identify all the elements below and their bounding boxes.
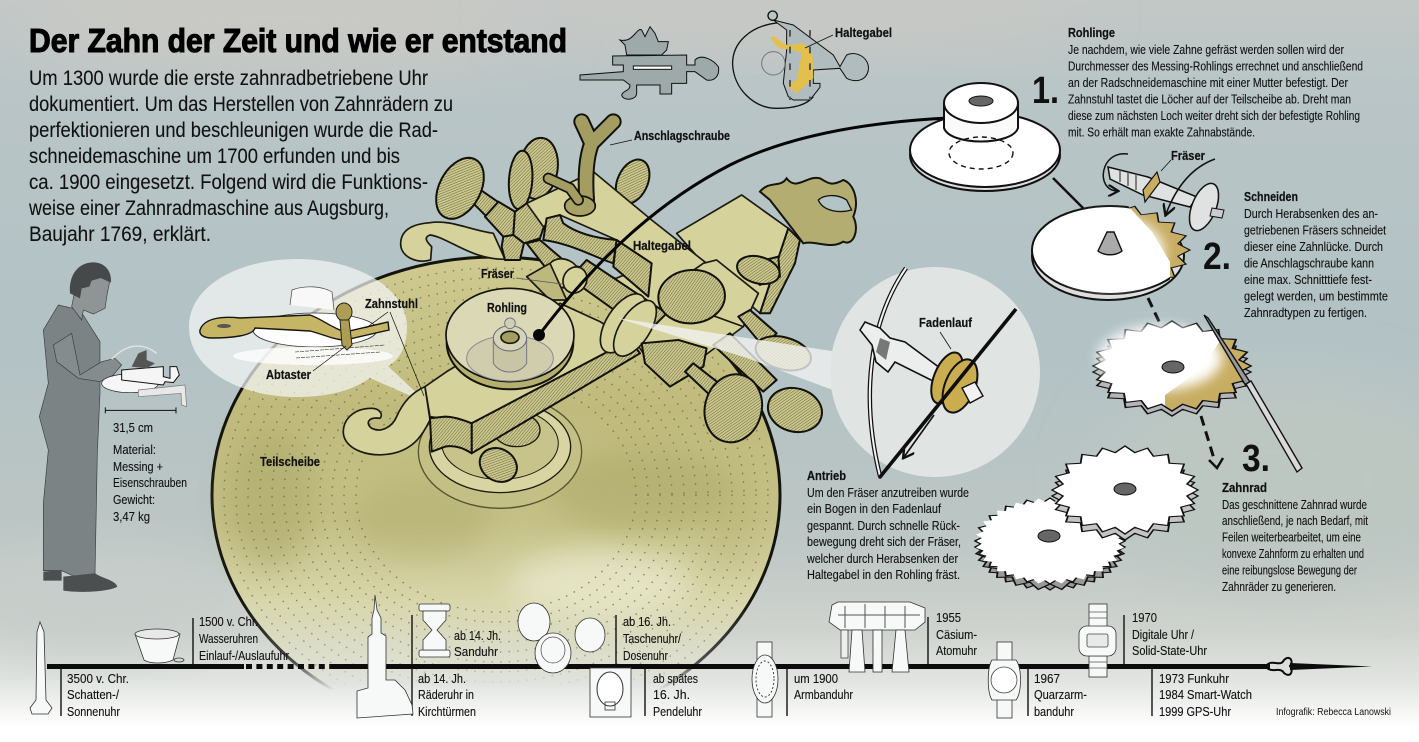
text block: Antrieb: ein Bogen in den Fadenlauf	[807, 501, 941, 516]
text block: Zahnrad	[1222, 480, 1368, 594]
icon: hourglass	[419, 604, 450, 657]
timeline labels: 1973 Funkuhr	[1159, 671, 1230, 686]
panel: gears right	[910, 83, 1302, 596]
timeline labels: Sonnenuhr	[67, 704, 121, 719]
hex block right	[642, 333, 777, 398]
text block: Schneiden: Zahnradtypen zu fertigen.	[1244, 305, 1367, 320]
timeline labels: 1500 v. Chr.	[199, 614, 258, 629]
machine facts: Eisenschrauben	[113, 475, 187, 490]
icon: pocket watches	[518, 603, 605, 673]
timeline labels: Taschenuhr/	[623, 631, 681, 646]
timeline labels: Atomuhr	[936, 643, 978, 658]
timeline labels: Quarzarm-	[1034, 687, 1087, 702]
scale bar	[105, 407, 176, 413]
ticks	[61, 615, 1152, 716]
icon: Fräser	[1103, 154, 1224, 235]
text block: Rohlinge: mit. So erhält man exakte Zahnabstände.	[1068, 124, 1255, 140]
icon: water clock	[135, 629, 184, 663]
step numbers: 1.	[1032, 70, 1059, 112]
right block	[677, 195, 800, 313]
panel: Teilscheibe disc	[212, 257, 780, 733]
text block: Zahnrad: konvexe Zahnform zu erhalten und	[1222, 546, 1364, 561]
intro text: Baujahr 1769, erklärt.	[29, 223, 211, 246]
text block: Schneiden: dieser eine Zahnlücke. Durch	[1244, 239, 1383, 254]
text block: Antrieb: Um den Fräser anzutreiben wurde	[807, 485, 969, 500]
diagram: side view machine	[580, 27, 719, 99]
timeline labels: Pendeluhr	[653, 704, 703, 719]
timeline labels	[67, 610, 1252, 719]
upper scroll	[401, 222, 505, 261]
icon: spindle with gold pulley	[860, 322, 984, 418]
text block: Zahnrad: eine reibungslose Bewegung der	[1222, 562, 1357, 578]
icon: fine-toothed gear	[964, 492, 1136, 596]
spindle	[527, 240, 667, 333]
text block: Antrieb: gespannt. Durch schnelle Rück-	[807, 518, 960, 533]
machine facts: Messing +	[113, 459, 163, 474]
person	[39, 262, 122, 592]
Anschlagschraube Y-screw	[548, 122, 613, 216]
text block: Rohlinge: an der Radschneidemaschine mit einer Mutter befestigt. Der	[1068, 75, 1349, 90]
machine part labels: Fadenlauf	[919, 315, 973, 330]
callout: Zahnstuhl magnifier	[189, 259, 427, 403]
Haltegabel plate	[527, 172, 758, 357]
timeline labels: ab 16. Jh.	[623, 614, 671, 629]
timeline labels: Armbanduhr	[794, 687, 854, 702]
timeline labels: Räderuhr in	[418, 687, 474, 702]
illustration: man standing with machine	[39, 262, 187, 592]
machine part labels: Teilscheibe	[260, 454, 320, 469]
timeline labels: ab 14. Jh.	[454, 628, 501, 643]
intro text: dokumentiert. Um das Herstellen von Zahnrädern zu	[29, 93, 453, 116]
text block: Zahnrad: Zahnräder zu generieren.	[1222, 579, 1336, 594]
icon: church tower	[357, 595, 413, 718]
timeline labels: 1970	[1132, 610, 1157, 625]
text block: Rohlinge: Zahnstuhl tastet die Löcher auf der Teilscheibe ab. Dreht man	[1068, 92, 1351, 106]
machine part labels: Abtaster	[266, 367, 311, 382]
timeline labels: Dosenuhr	[623, 648, 669, 663]
text block: Rohlinge: Je nachdem, wie viele Zahne gefräst werden sollen wird der	[1068, 42, 1345, 57]
timeline labels: Einlauf-/Auslaufuhr	[199, 648, 290, 663]
intro text: weise einer Zahnradmaschine aus Augsburg,	[28, 197, 389, 220]
text block: Schneiden: gelegt werden, um bestimmte	[1244, 288, 1388, 304]
timeline bar	[47, 658, 1372, 675]
text block: Zahnrad: anschließend, je nach Bedarf, mit	[1222, 513, 1368, 528]
icon: digital watch	[1079, 604, 1116, 677]
timeline labels: um 1900	[794, 671, 838, 686]
illustration: Radschneidemaschine	[343, 122, 856, 508]
title: Der Zahn der Zeit und wie er entstand	[29, 22, 567, 59]
text block: Antrieb: bewegung dreht sich der Fräser,	[807, 534, 961, 549]
machine part labels: Fräser	[481, 266, 514, 281]
icon: quartz wristwatch	[988, 642, 1020, 718]
text block: Schneiden: eine max. Schnitttiefe fest-	[1244, 272, 1372, 287]
timeline	[30, 595, 1372, 719]
arrow: dashed to gear	[1148, 298, 1163, 330]
timeline labels: ab 14. Jh.	[418, 671, 466, 686]
intro text: Um 1300 wurde die erste zahnradbetriebene Uhr	[29, 67, 428, 90]
icon: atomic clock	[829, 602, 925, 672]
machine part labels: Haltegabel	[835, 25, 892, 40]
timeline labels: 3500 v. Chr.	[67, 671, 129, 686]
text block: Schneiden: die Anschlagschraube kann	[1244, 256, 1374, 270]
timeline labels: Solid-State-Uhr	[1132, 643, 1208, 658]
timeline labels: 1999 GPS-Uhr	[1159, 704, 1232, 719]
text block: Schneiden: Schneiden	[1244, 189, 1298, 204]
timeline labels: Schatten-/	[67, 687, 119, 702]
icon: spindle sketch	[233, 287, 393, 365]
machine part labels: Rohling	[487, 300, 527, 315]
arrow: dashed to finished gears	[1201, 416, 1223, 468]
text block: Rohlinge: Rohlinge	[1068, 25, 1115, 40]
timeline labels: Cäsium-	[936, 627, 977, 642]
mini machine	[102, 346, 187, 407]
back knobs	[426, 135, 656, 227]
machine part labels	[260, 25, 1205, 469]
machine facts: 31,5 cm	[113, 420, 153, 435]
decorative handle	[760, 178, 856, 245]
icon: disc one with blank	[910, 83, 1084, 209]
icon: disc two being cut	[1030, 204, 1190, 300]
text block: Zahnrad: Das geschnittene Zahnrad wurde	[1222, 497, 1367, 512]
icon: gear with file	[1093, 315, 1302, 472]
lower arm	[343, 303, 640, 455]
timeline labels: Sanduhr	[454, 644, 499, 659]
machine part labels: Zahnstuhl	[365, 296, 418, 311]
diagram: top view machine	[733, 11, 868, 108]
timeline labels: Wasseruhren	[199, 631, 258, 646]
step numbers: 2.	[1203, 236, 1231, 278]
icon: finished gear	[1052, 446, 1198, 540]
timeline labels: 1984 Smart-Watch	[1159, 687, 1252, 702]
pulley	[591, 286, 665, 363]
timeline labels: 1967	[1034, 671, 1060, 686]
step numbers	[1032, 70, 1270, 480]
hex nuts	[485, 202, 547, 260]
step numbers: 3.	[1242, 438, 1270, 480]
text block: Antrieb: welcher durch Herabsenken der	[806, 551, 959, 566]
machine facts: Gewicht:	[113, 492, 155, 507]
icon: obelisk	[30, 622, 52, 714]
text block: Rohlinge	[1068, 25, 1363, 140]
timeline labels: 16. Jh.	[653, 687, 690, 702]
text block: Antrieb	[806, 468, 969, 582]
machine part labels: Fräser	[1171, 148, 1205, 163]
icon: pendulum clock	[590, 668, 631, 717]
Rohling disc	[446, 288, 574, 389]
text block: Schneiden	[1244, 189, 1388, 320]
intro text: perfektionieren und beschleunigen wurde die Rad-	[29, 119, 438, 142]
text block: Schneiden: Durch Herabsenken des an-	[1244, 206, 1378, 221]
machine part labels: Haltegabel	[633, 238, 691, 253]
credit: Infografik: Rebecca Lanowski	[1276, 706, 1391, 718]
base ring	[418, 395, 582, 508]
callout: Fadenlauf magnifier	[617, 267, 1040, 479]
icon: wristwatch	[752, 642, 778, 717]
machine facts: 3,47 kg	[113, 509, 150, 524]
timeline labels: 1955	[936, 610, 961, 625]
timeline labels: Digitale Uhr /	[1132, 627, 1194, 642]
text block: Zahnrad: Zahnrad	[1222, 480, 1267, 495]
icon: gold Zahnstuhl arm	[200, 303, 389, 350]
icon: bow	[870, 268, 906, 476]
machine facts: Material:	[113, 442, 156, 457]
machine facts	[113, 420, 187, 524]
text block: Zahnrad: Feilen weiterbearbeitet, um eine	[1222, 530, 1361, 544]
arrow: string movement	[878, 309, 1016, 479]
arrow: line from Rohling to disc	[533, 118, 948, 341]
intro text: schneidemaschine um 1700 erfunden und bis	[29, 145, 400, 168]
machine part labels: Anschlagschraube	[634, 128, 730, 143]
timeline labels: ab spätes	[653, 671, 698, 686]
text block: Antrieb: Antrieb	[807, 468, 846, 483]
timeline labels: Kirchtürmen	[418, 704, 476, 719]
intro text	[28, 67, 453, 246]
text block: Antrieb: Haltegabel in den Rohling fräst.	[807, 567, 960, 582]
timeline labels: banduhr	[1034, 704, 1075, 719]
knobs	[656, 251, 827, 449]
text block: Schneiden: getriebenen Fräsers schneidet	[1244, 222, 1386, 238]
intro text: ca. 1900 eingesetzt. Folgend wird die Funktions-	[29, 171, 428, 194]
